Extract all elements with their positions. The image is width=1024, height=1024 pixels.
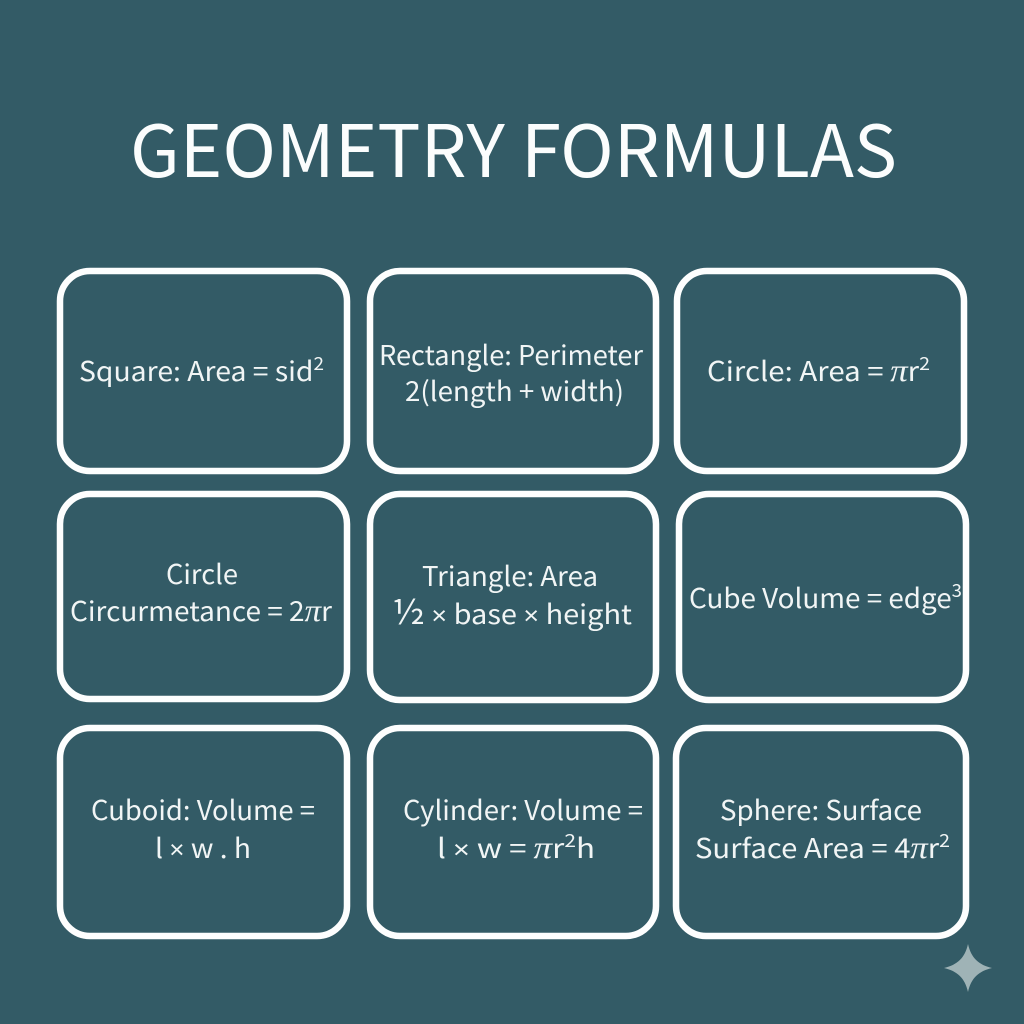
- panel: sphere surface area: Sphere: Surface: [720, 789, 922, 828]
- panel: circle area: [677, 271, 964, 471]
- panel: cuboid volume: [60, 728, 347, 936]
- title: GEOMETRY FORMULAS: [130, 93, 897, 198]
- panel: circle area: Circle: Area = πr: [707, 350, 918, 389]
- panel: cylinder volume: Cylinder: Volume =: [403, 789, 643, 828]
- panel: square area: 2: [313, 350, 324, 376]
- panel: circle circumference: [60, 494, 347, 699]
- panel: cylinder volume: l × w = πr: [437, 827, 563, 866]
- panel: cube volume: [679, 494, 966, 700]
- panel: square area: [60, 271, 347, 471]
- panel: cylinder volume: [370, 728, 656, 936]
- panel: cube volume: Cube Volume = edge: [689, 577, 944, 616]
- panel: rectangle perimeter: [370, 271, 656, 471]
- panel: circle circumference: Circle: [166, 553, 238, 592]
- panel: triangle area: ½ × base × height: [392, 585, 632, 634]
- panel: rectangle perimeter: Rectangle: Perimeter: [379, 334, 644, 373]
- panel: cylinder volume: h: [576, 827, 595, 866]
- panel: cuboid volume: Cuboid: Volume =: [91, 789, 315, 828]
- panel: square area: Square: Area = sid: [79, 350, 302, 389]
- panel: cube volume: 3: [952, 577, 962, 603]
- panel: circle circumference: Circurmetance = 2 πr: [70, 590, 333, 629]
- panel: cylinder volume: 2: [564, 827, 576, 853]
- panel: triangle area: Triangle: Area: [422, 555, 598, 594]
- panel: sphere surface area: 2: [939, 827, 950, 853]
- panel: circle area: 2: [919, 350, 930, 376]
- panel: rectangle perimeter: 2(length + width): [405, 370, 624, 409]
- panel: cuboid volume: l × w . h: [155, 827, 251, 866]
- panel: triangle area: [370, 494, 656, 700]
- icon: sparkle: [944, 944, 992, 992]
- panel: sphere surface area: [676, 728, 966, 936]
- panel: sphere surface area: Surface Area = 4 πr: [695, 827, 938, 866]
